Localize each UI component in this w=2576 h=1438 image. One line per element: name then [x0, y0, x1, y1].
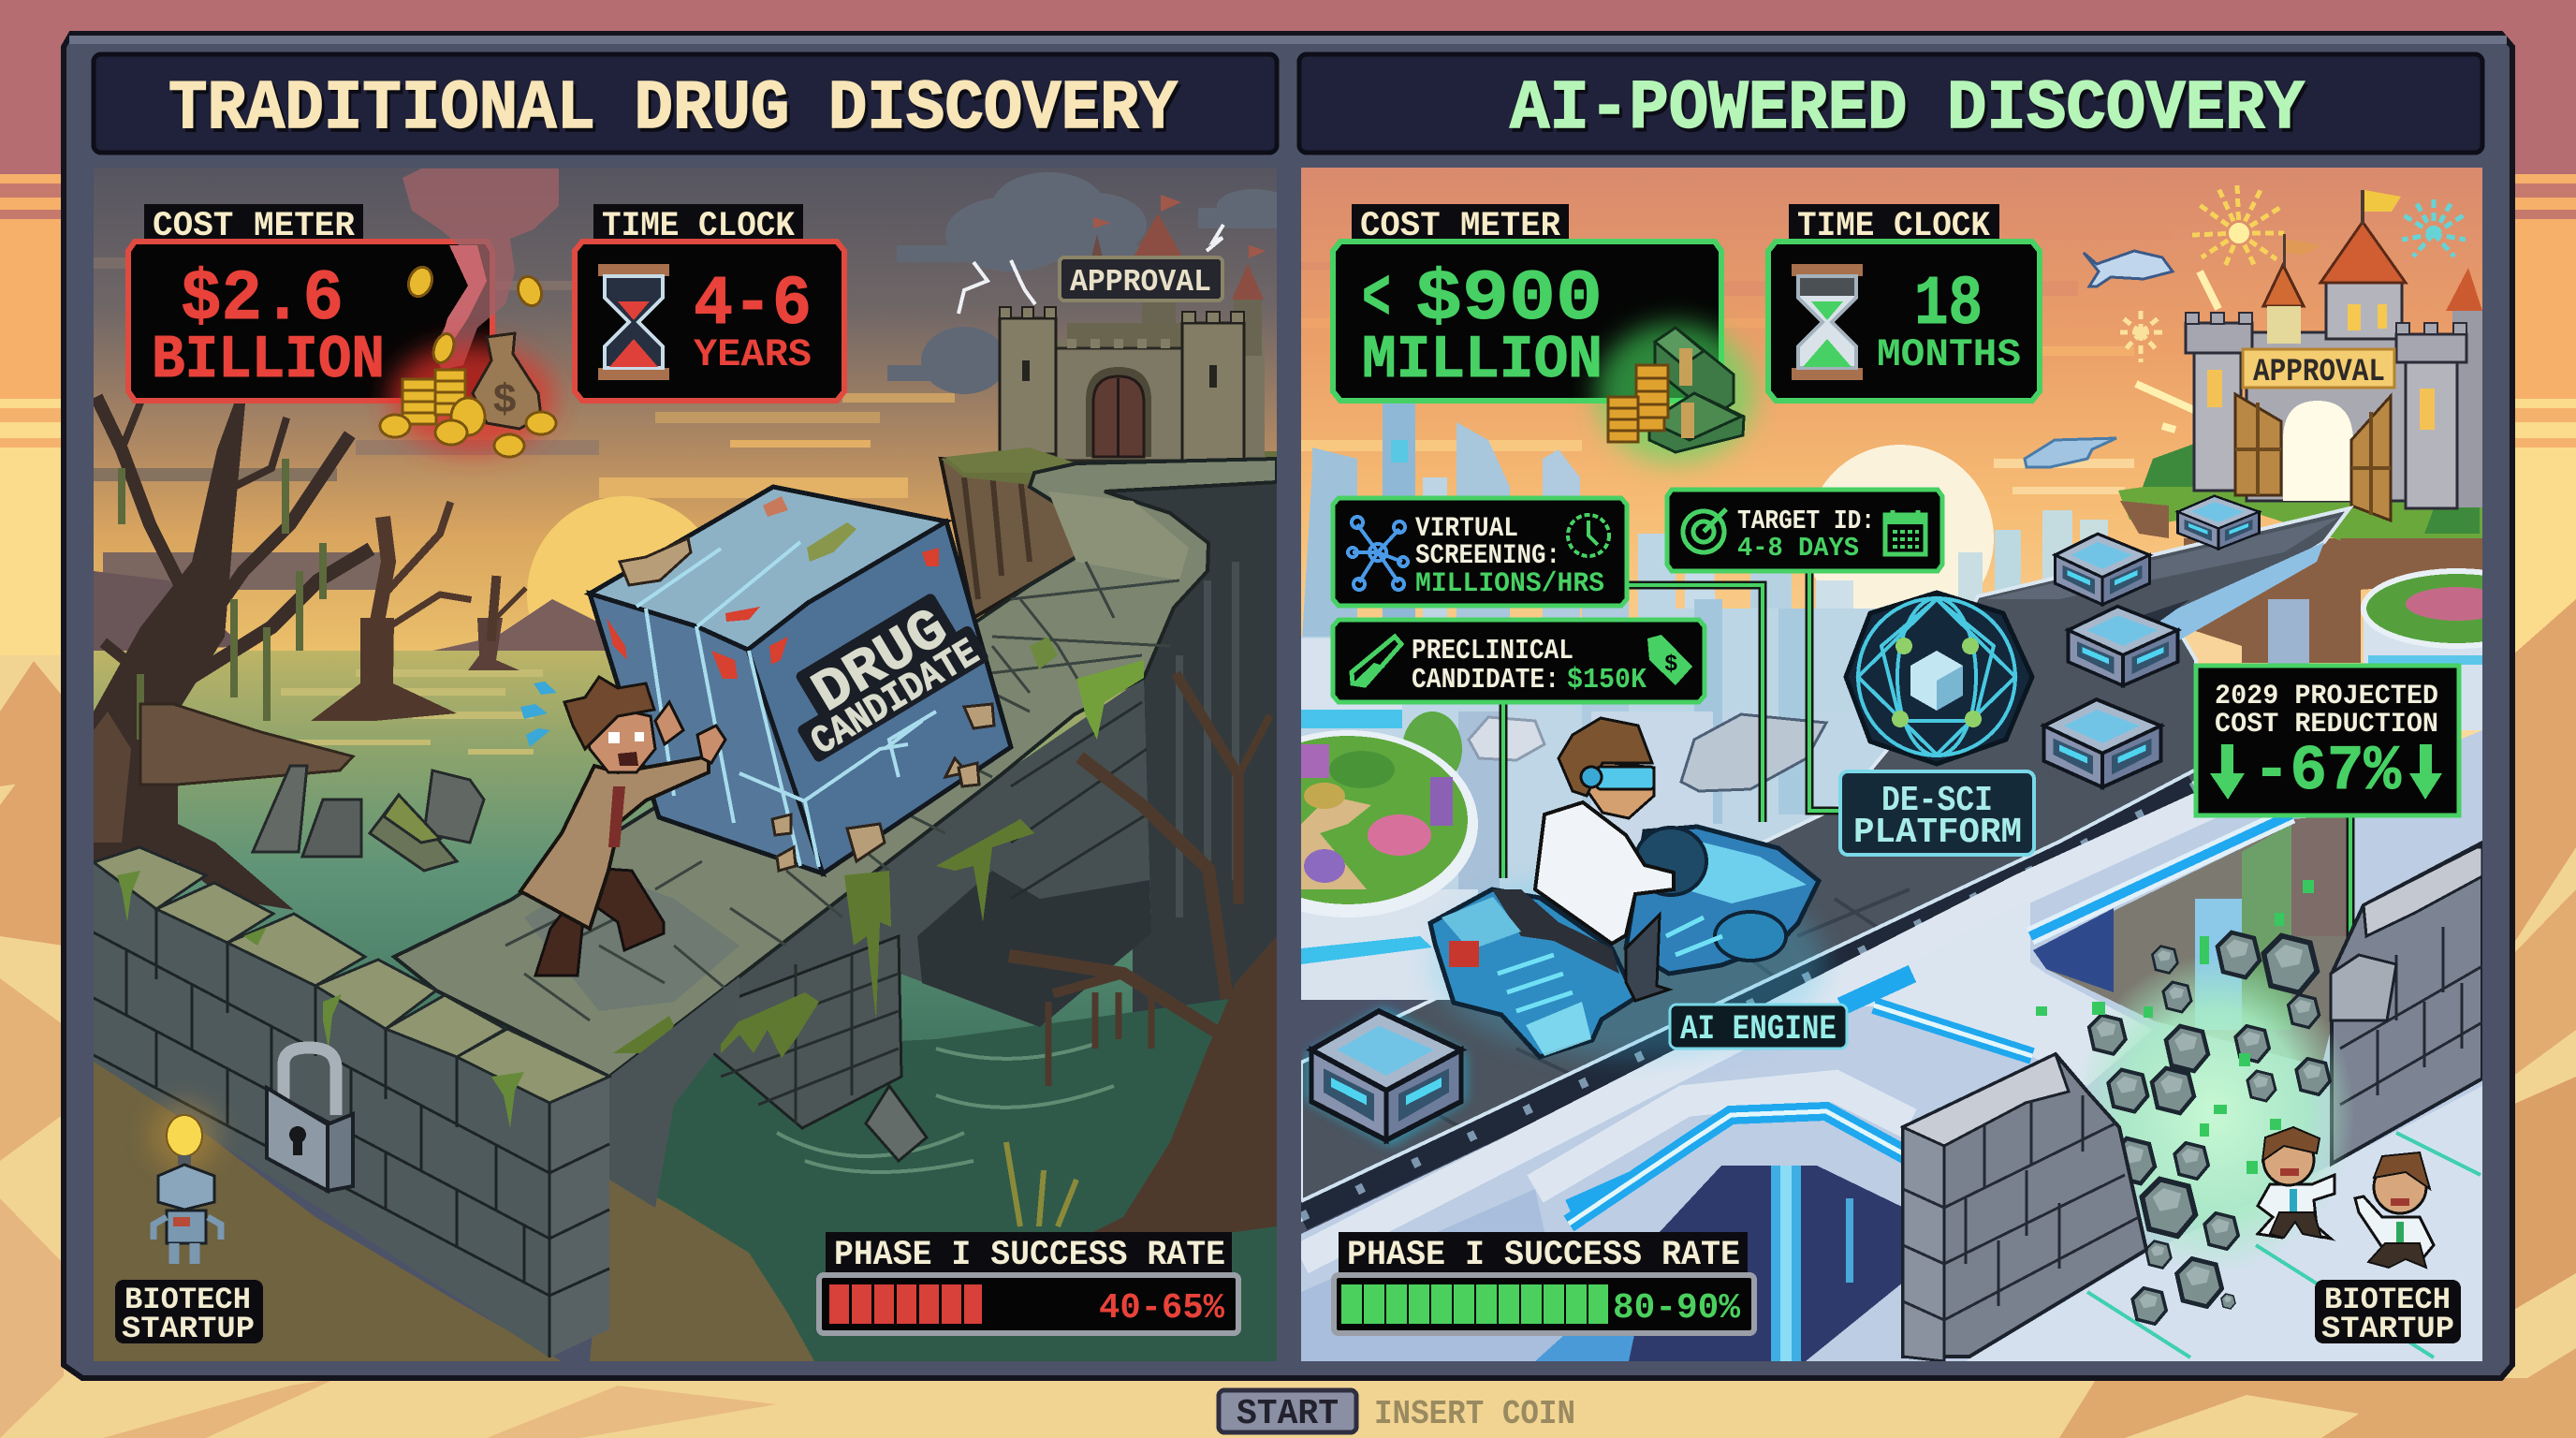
padlock [267, 1048, 353, 1191]
time clock: traditional: TIME CLOCK [602, 207, 796, 246]
icon: calendar [1885, 510, 1925, 554]
stone wall front [94, 862, 739, 1357]
icon: flying ships [2025, 251, 2173, 467]
cost meter: traditional: $2.6 [181, 259, 344, 340]
fireworks [2120, 184, 2466, 362]
flying car behind [1681, 714, 1826, 791]
foreground broken wall [1903, 1054, 2146, 1361]
bridge side wall and pier [713, 678, 1151, 1161]
conveyor data cubes [2044, 496, 2260, 787]
foreground data cube [1307, 1007, 1466, 1146]
header: AI-powered discovery [1299, 54, 2482, 153]
garden dome left [1218, 730, 1478, 1000]
pale right floor [1966, 1086, 2482, 1361]
label: AI engine: AI ENGINE [1680, 1010, 1837, 1049]
icon: network [1348, 517, 1408, 590]
success rate meter: AI: 80-90% [1613, 1288, 1740, 1328]
label: drug candidate [771, 584, 994, 770]
label: biotech startup: BIOTECH [124, 1283, 251, 1317]
conveyor road [1301, 508, 2349, 1220]
white walkway band [1301, 786, 2247, 1259]
dead tree: large left [94, 374, 365, 910]
label: de-sci platform: DE-SCI [1881, 781, 1993, 821]
light blue floor [1301, 730, 2482, 1361]
dead trees: middle [311, 506, 524, 721]
success rate meter: traditional [819, 1232, 1238, 1333]
icon: de-sci globe [1846, 593, 2032, 764]
icon: price tag [1647, 635, 1692, 685]
pale curb [1535, 1086, 1910, 1189]
grass over cliff [945, 448, 1073, 474]
green breakthrough burst [2073, 955, 2354, 1273]
gate [2283, 401, 2353, 501]
time clock: AI [1768, 204, 2040, 401]
label: biotech startup [115, 1280, 263, 1346]
cliff and chasm [938, 451, 1277, 1012]
castle: approval open gates [2186, 190, 2482, 521]
neon highlight [1569, 1005, 2032, 1224]
connector lines [1503, 566, 2350, 944]
label: biotech startup: STARTUP [2321, 1312, 2454, 1346]
storm clouds [887, 172, 1292, 394]
start button: START [1237, 1394, 1339, 1434]
small green trees behind [1402, 712, 1462, 786]
water ripples [776, 1043, 1114, 1174]
futuristic city skyline [1301, 404, 2108, 955]
icon: price tag: $ [1664, 653, 1677, 678]
hanging moss on bridge [613, 819, 1034, 1077]
character: struggling scientist [520, 677, 725, 976]
icon: money bag and burning coins [380, 264, 556, 457]
cost meter: AI: MILLION [1362, 326, 1603, 395]
bright sun [1807, 445, 1994, 632]
pale floor slab [1825, 899, 2153, 1086]
callout: 2029 projected cost reduction: -67% [2253, 736, 2401, 808]
castle island [2118, 444, 2482, 665]
green data fragments [2036, 880, 2314, 1174]
hanging moss [122, 459, 323, 740]
callout: virtual screening [1333, 498, 1627, 606]
callout: target ID: 4-8 DAYS [1737, 533, 1859, 564]
label: drug candidate: DRUG [801, 595, 960, 727]
robot with lightbulb [151, 1102, 221, 1264]
cloud pod [1469, 717, 1544, 760]
sunken ruins [253, 766, 484, 871]
bike front [1626, 827, 1819, 974]
rubble on cube [620, 538, 994, 871]
icon: hourglass red [598, 264, 669, 380]
right broken wall [2331, 843, 2482, 1164]
moss on wall [117, 871, 524, 1128]
red progress segments [829, 1284, 982, 1324]
icon: hourglass green [1792, 264, 1863, 380]
swamp sky [94, 168, 1277, 664]
time clock: AI: 18 [1914, 266, 1983, 345]
upper road stripe [2115, 542, 2324, 655]
floor green lines [2087, 1133, 2481, 1357]
label: biotech startup [2315, 1280, 2461, 1346]
lightning bolts [959, 225, 1223, 314]
panel: AI-powered discovery scene [1218, 168, 2551, 1361]
icon: down arrow right [2409, 744, 2442, 800]
callout: target ID: TARGET ID: [1737, 506, 1875, 536]
callout: virtual screening: SCREENING: [1415, 540, 1560, 572]
sunrise sky [1301, 168, 2482, 748]
door [1086, 367, 1151, 457]
neon conduits [1569, 974, 2032, 1224]
lower floor tint [1301, 1189, 1573, 1361]
cost meter: traditional [128, 204, 492, 401]
icon: target [1683, 509, 1726, 552]
callout: 2029 projected cost reduction: COST REDUCTION [2215, 709, 2438, 741]
time clock: AI: MONTHS [1877, 332, 2021, 377]
distant hills [94, 571, 230, 651]
success rate meter: traditional: PHASE I SUCCESS RATE [834, 1236, 1225, 1275]
cost meter: AI [1333, 204, 1721, 401]
water glints [281, 669, 543, 755]
callout: preclinical candidate [1333, 620, 1705, 702]
time clock: traditional: 4-6 [694, 266, 812, 345]
time clock: AI: TIME CLOCK [1797, 207, 1991, 246]
header: traditional drug discovery: TRADITIONAL DRUG DISCOVERY [168, 70, 1178, 149]
AI engine hover bike and rider [1430, 718, 1825, 1058]
hands [697, 726, 725, 763]
insert coin text: INSERT COIN [1374, 1395, 1575, 1433]
founder two [2355, 1152, 2434, 1268]
callout: 2029 projected cost reduction [2196, 666, 2459, 815]
callout: virtual screening: MILLIONS/HRS [1415, 568, 1604, 600]
callout: preclinical candidate: PRECLINICAL [1412, 635, 1573, 668]
swamp water [94, 651, 1133, 1041]
head [585, 707, 655, 772]
pit behind right wall [2030, 814, 2349, 1067]
bike rear [1430, 889, 1635, 1057]
characters: cheering founders [2258, 1127, 2434, 1268]
panel: traditional drug discovery scene [94, 168, 1292, 1361]
smoke plume [402, 169, 559, 370]
rubble field [2089, 932, 2330, 1324]
time clock: traditional [575, 204, 844, 401]
time clock: traditional: YEARS [694, 332, 812, 377]
lower trench [1535, 1166, 1904, 1361]
right garden dome [2364, 571, 2551, 730]
cost meter: traditional: BILLION [152, 326, 385, 395]
icon: clock [1568, 515, 1609, 556]
cost meter: AI: COST METER [1360, 207, 1561, 246]
icon: test tube [1352, 637, 1401, 685]
dirt foreground right [590, 1170, 814, 1361]
label: de-sci platform: PLATFORM [1853, 813, 2022, 853]
stone wall top blocks [94, 847, 609, 1103]
callout: 2029 projected cost reduction: 2029 PROJECTED [2215, 681, 2438, 712]
swamp reeds [1006, 1142, 1076, 1226]
roofs [1134, 213, 1181, 256]
setting sun [527, 496, 697, 621]
stone deck and path to castle [394, 459, 1277, 1077]
coat [520, 756, 709, 929]
callout: virtual screening: VIRTUAL [1415, 513, 1518, 545]
label: approval banner: APPROVAL [2253, 355, 2385, 390]
rider [1535, 718, 1674, 1001]
success rate meter: traditional: 40-65% [1099, 1288, 1224, 1328]
cube: drug candidate boulder [590, 487, 1011, 873]
towers [2194, 353, 2241, 491]
rockets trails [2136, 271, 2218, 430]
cost meter: AI: < [1362, 259, 1391, 340]
lower dark swamp [608, 992, 1277, 1361]
dead tree: right foreground [1016, 678, 1277, 1240]
green progress segments [1341, 1284, 1608, 1324]
success rate meter: AI: PHASE I SUCCESS RATE [1347, 1236, 1740, 1275]
mud bank [140, 704, 353, 785]
callout: preclinical candidate: CANDIDATE: [1412, 664, 1559, 697]
towers [1000, 318, 1056, 454]
label: drug candidate: CANDIDATE [804, 630, 988, 766]
icon: glowing cash and coins [1596, 323, 1755, 463]
icon: down arrow left [2210, 744, 2245, 800]
cost meter: traditional: COST METER [153, 207, 356, 246]
success rate meter: AI [1334, 1232, 1754, 1333]
callout: preclinical candidate: $150K [1567, 664, 1647, 697]
castle: approval [1000, 195, 1266, 463]
label: approval: APPROVAL [1070, 265, 1211, 300]
header: AI-powered discovery: AI-POWERED DISCOVERY [1510, 70, 2305, 149]
callout: target ID [1667, 490, 1942, 571]
legs [535, 869, 664, 976]
dirt foreground left [94, 1049, 562, 1361]
founder one [2258, 1127, 2334, 1239]
cost meter: AI: $900 [1415, 259, 1603, 340]
label: biotech startup: STARTUP [122, 1312, 255, 1346]
firework core [2229, 223, 2249, 243]
connector lines green [1503, 566, 2350, 944]
label: biotech startup: BIOTECH [2324, 1283, 2451, 1317]
icon: money bag and burning coins: $ [492, 378, 517, 425]
hill [434, 599, 605, 651]
label: de-sci platform [1840, 771, 2034, 855]
